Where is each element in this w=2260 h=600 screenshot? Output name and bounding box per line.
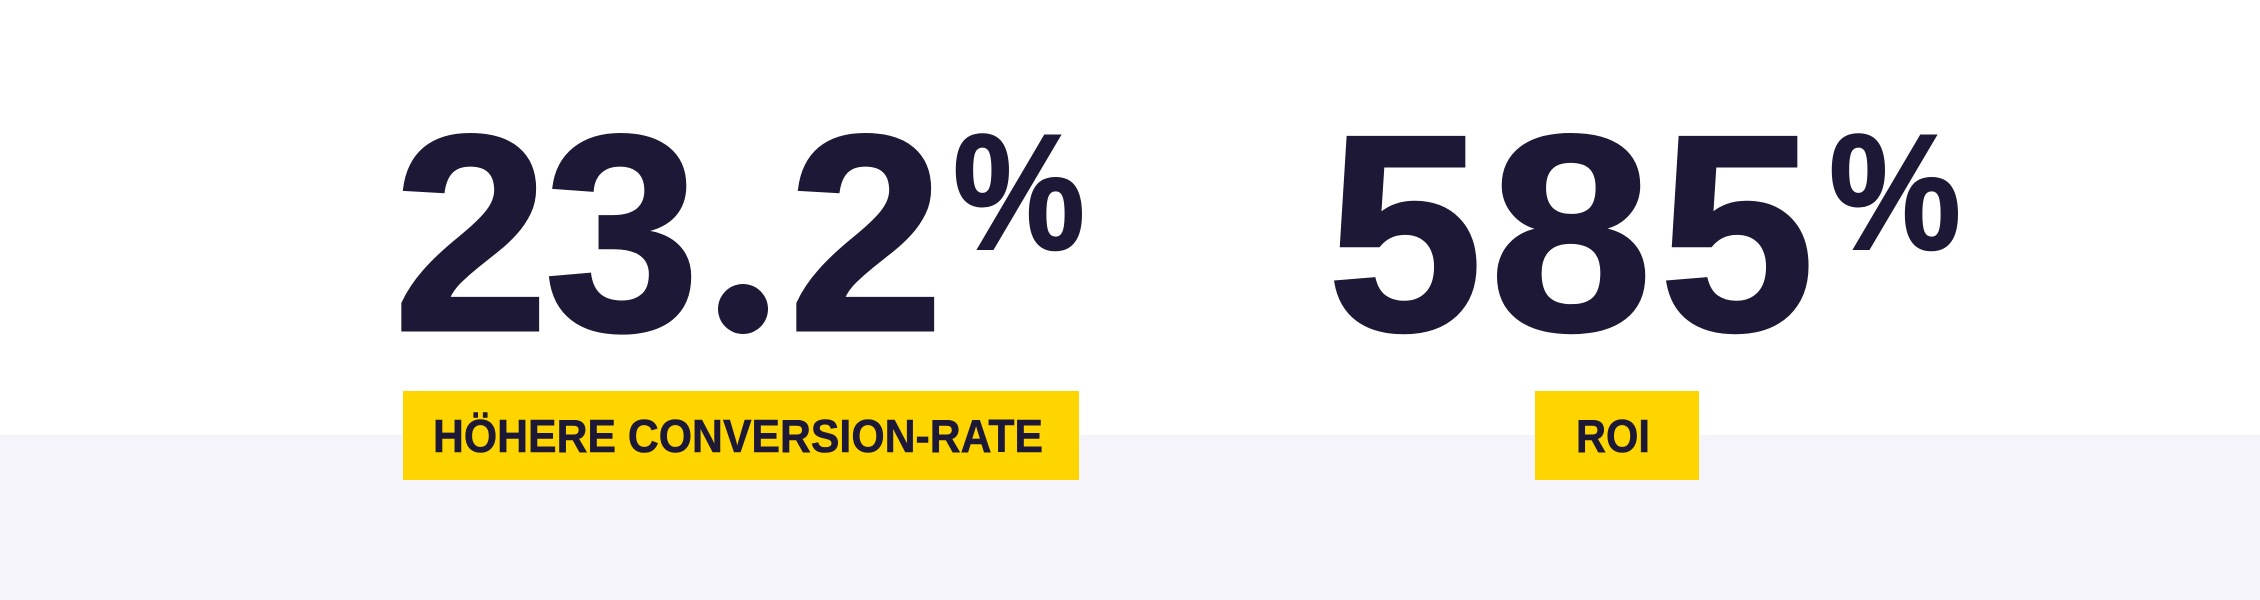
statistic: 23.2 percent: . <box>721 175 765 354</box>
label bar: conversion rate <box>403 391 1079 480</box>
statistic: 585 percent <box>1327 76 1961 390</box>
percent sign: % <box>953 101 1085 285</box>
statistic: 585 percent: 5 <box>1659 78 1815 390</box>
statistic: 23.2 percent <box>393 78 1085 390</box>
label bar: ROI: ROI <box>1576 410 1650 462</box>
label bar: conversion rate: HÖHERE CONVERSION-RATE <box>433 410 1043 462</box>
statistic: 23.2 percent: 3 <box>544 78 700 390</box>
statistic: 23.2 percent: 2 <box>393 78 549 390</box>
label bar: ROI <box>1535 391 1699 480</box>
statistic: 585 percent: 5 <box>1327 78 1483 390</box>
percent sign: % <box>1829 101 1961 285</box>
statistic: 23.2 percent: 2 <box>788 78 944 390</box>
statistic: 585 percent: 8 <box>1489 76 1653 389</box>
